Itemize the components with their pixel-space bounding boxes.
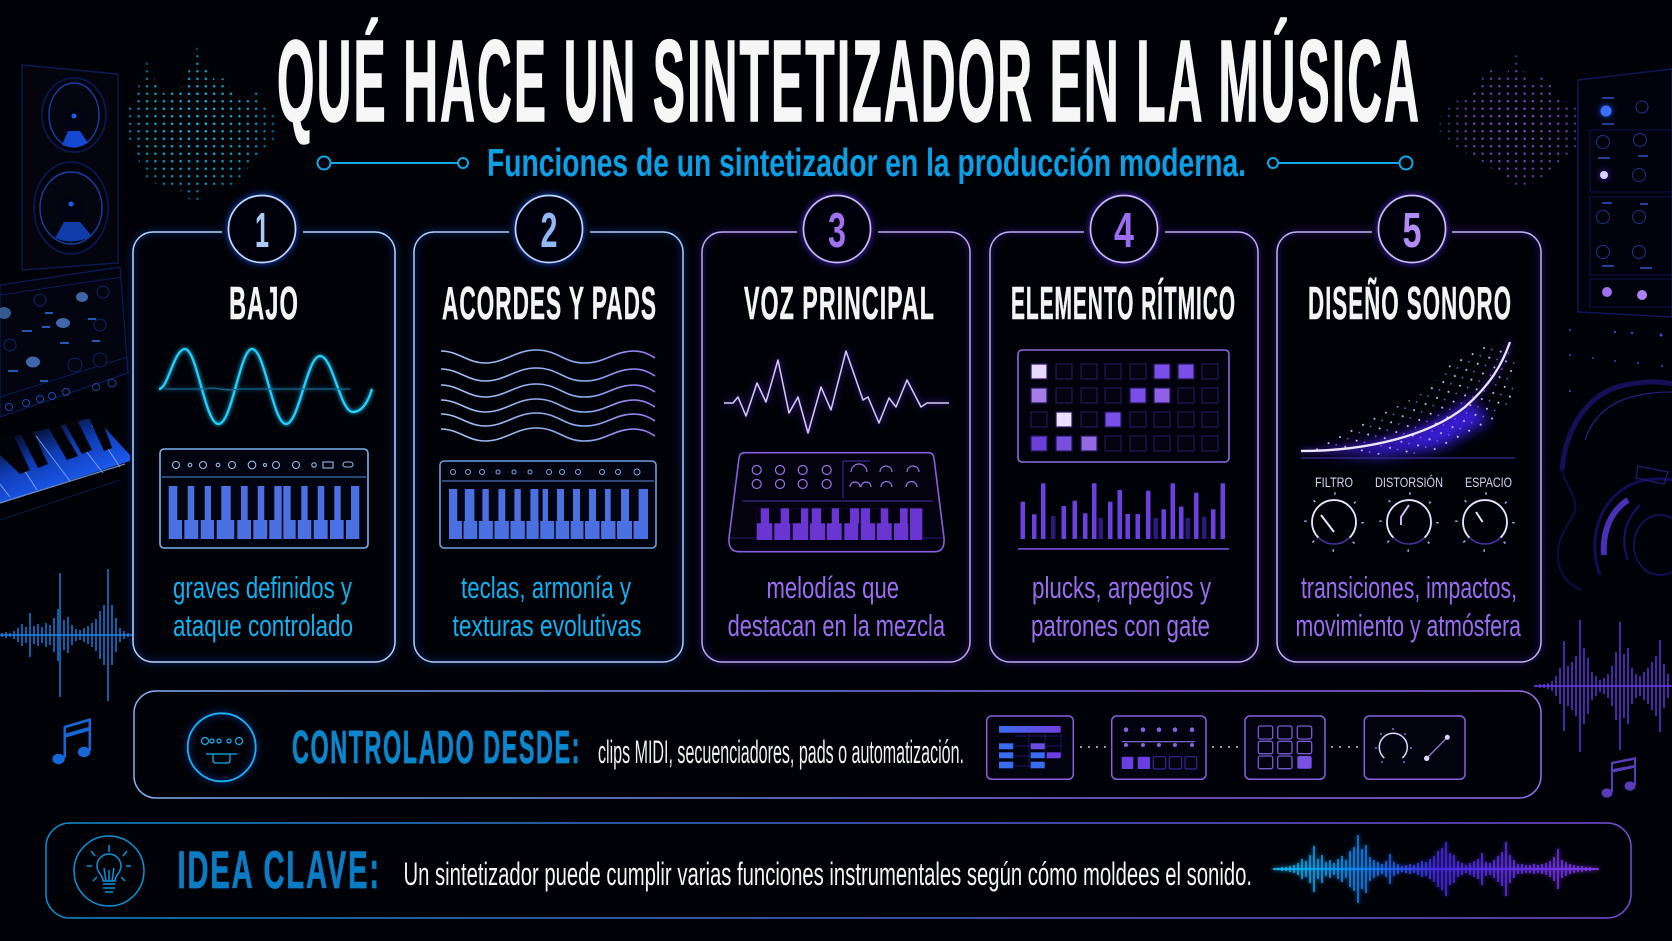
sound design curve with particles (1301, 342, 1515, 458)
lead waveform (724, 351, 949, 433)
knob labels: FILTRO (1315, 474, 1353, 490)
knob labels: ESPACIO (1465, 474, 1512, 490)
description (728, 570, 946, 643)
description: plucks, arpegios y (1032, 570, 1211, 605)
description: ataque controlado (173, 608, 353, 643)
number badge 4 (1090, 196, 1158, 262)
label: CONTROLADO DESDE: (292, 721, 581, 773)
bass sine wave (159, 349, 372, 424)
mini panel: sequencer (1112, 716, 1206, 779)
panel: 2 acordes y pads (414, 196, 683, 662)
decoration: left synth panel (0, 267, 128, 417)
label: IDEA CLAVE: (178, 841, 381, 900)
text: clips MIDI, secuenciadores, pads o automatización. (598, 734, 964, 770)
heading: VOZ PRINCIPAL (744, 277, 935, 329)
number badge 1: 1 (255, 204, 269, 258)
description (1031, 570, 1211, 643)
decoration: left piano keys (0, 415, 130, 520)
description (1296, 570, 1522, 643)
decoration: right dot equalizer (1438, 50, 1577, 190)
knob labels: DISTORSIÓN (1375, 474, 1443, 490)
knob labels (1315, 474, 1512, 490)
decoration: right rack unit (1569, 69, 1672, 392)
icon: light bulb (74, 836, 144, 906)
decoration: right headphones (1558, 382, 1672, 590)
knob: filtro (1306, 494, 1362, 550)
number badge 2 (516, 196, 582, 262)
panel: 3 voz principal (702, 196, 970, 662)
step sequencer grid (1018, 350, 1229, 462)
heading: BAJO (229, 277, 299, 329)
number badge 4: 4 (1114, 204, 1134, 258)
rhythm bars (1018, 483, 1229, 550)
subtitle: Funciones de un sintetizador en la producción moderna. (487, 142, 1246, 185)
waveform (1274, 835, 1598, 903)
description: destacan en la mezcla (728, 608, 946, 643)
panel: 4 elemento rítmico: ELEMENTO RÍTMICO (1011, 277, 1236, 329)
synth illustration (729, 453, 944, 552)
knob: espacio (1456, 494, 1514, 550)
panel: idea clave (46, 823, 1631, 918)
number badge 3: 3 (828, 204, 846, 258)
description (452, 570, 642, 643)
number badge 1 (228, 196, 296, 262)
subtitle ornament left (318, 156, 468, 170)
description: patrones con gate (1031, 608, 1210, 643)
number badge 3 (804, 196, 870, 262)
layered pad waves (441, 350, 655, 441)
decoration: right music note (1602, 757, 1636, 798)
panel: 2 acordes y pads: ACORDES Y PADS (442, 277, 657, 329)
decoration: right waveform (1534, 620, 1672, 752)
mini panel: pads (1245, 716, 1325, 779)
knob: distorsión (1380, 494, 1438, 550)
description: texturas evolutivas (452, 608, 642, 643)
number badge 5 (1378, 196, 1446, 262)
icon: controller (188, 713, 256, 781)
description: movimiento y atmósfera (1296, 608, 1522, 643)
mini panel: clip grid (987, 716, 1073, 779)
panel: controlado desde (134, 691, 1541, 798)
description: graves definidos y (173, 570, 352, 605)
panel: 4 elemento rítmico (990, 196, 1258, 662)
description: transiciones, impactos, (1301, 570, 1517, 605)
decoration: left speaker (22, 65, 118, 270)
decoration: left dot equalizer (128, 48, 274, 200)
panel: 1 bajo (133, 196, 395, 662)
subtitle ornament right (1268, 156, 1412, 170)
keyboard illustration (160, 449, 368, 548)
number badge 5: 5 (1402, 204, 1422, 258)
description (173, 570, 353, 643)
decoration: left music note (52, 718, 91, 764)
decoration: left waveform (0, 569, 132, 701)
number badge 2: 2 (540, 204, 558, 258)
description: melodías que (766, 570, 899, 605)
keyboard illustration (440, 461, 656, 548)
description: teclas, armonía y (461, 570, 631, 605)
panel: 5 diseño sonoro (1277, 196, 1541, 662)
mini panel: knob and automation (1364, 716, 1465, 779)
connector dots (1080, 746, 1358, 748)
